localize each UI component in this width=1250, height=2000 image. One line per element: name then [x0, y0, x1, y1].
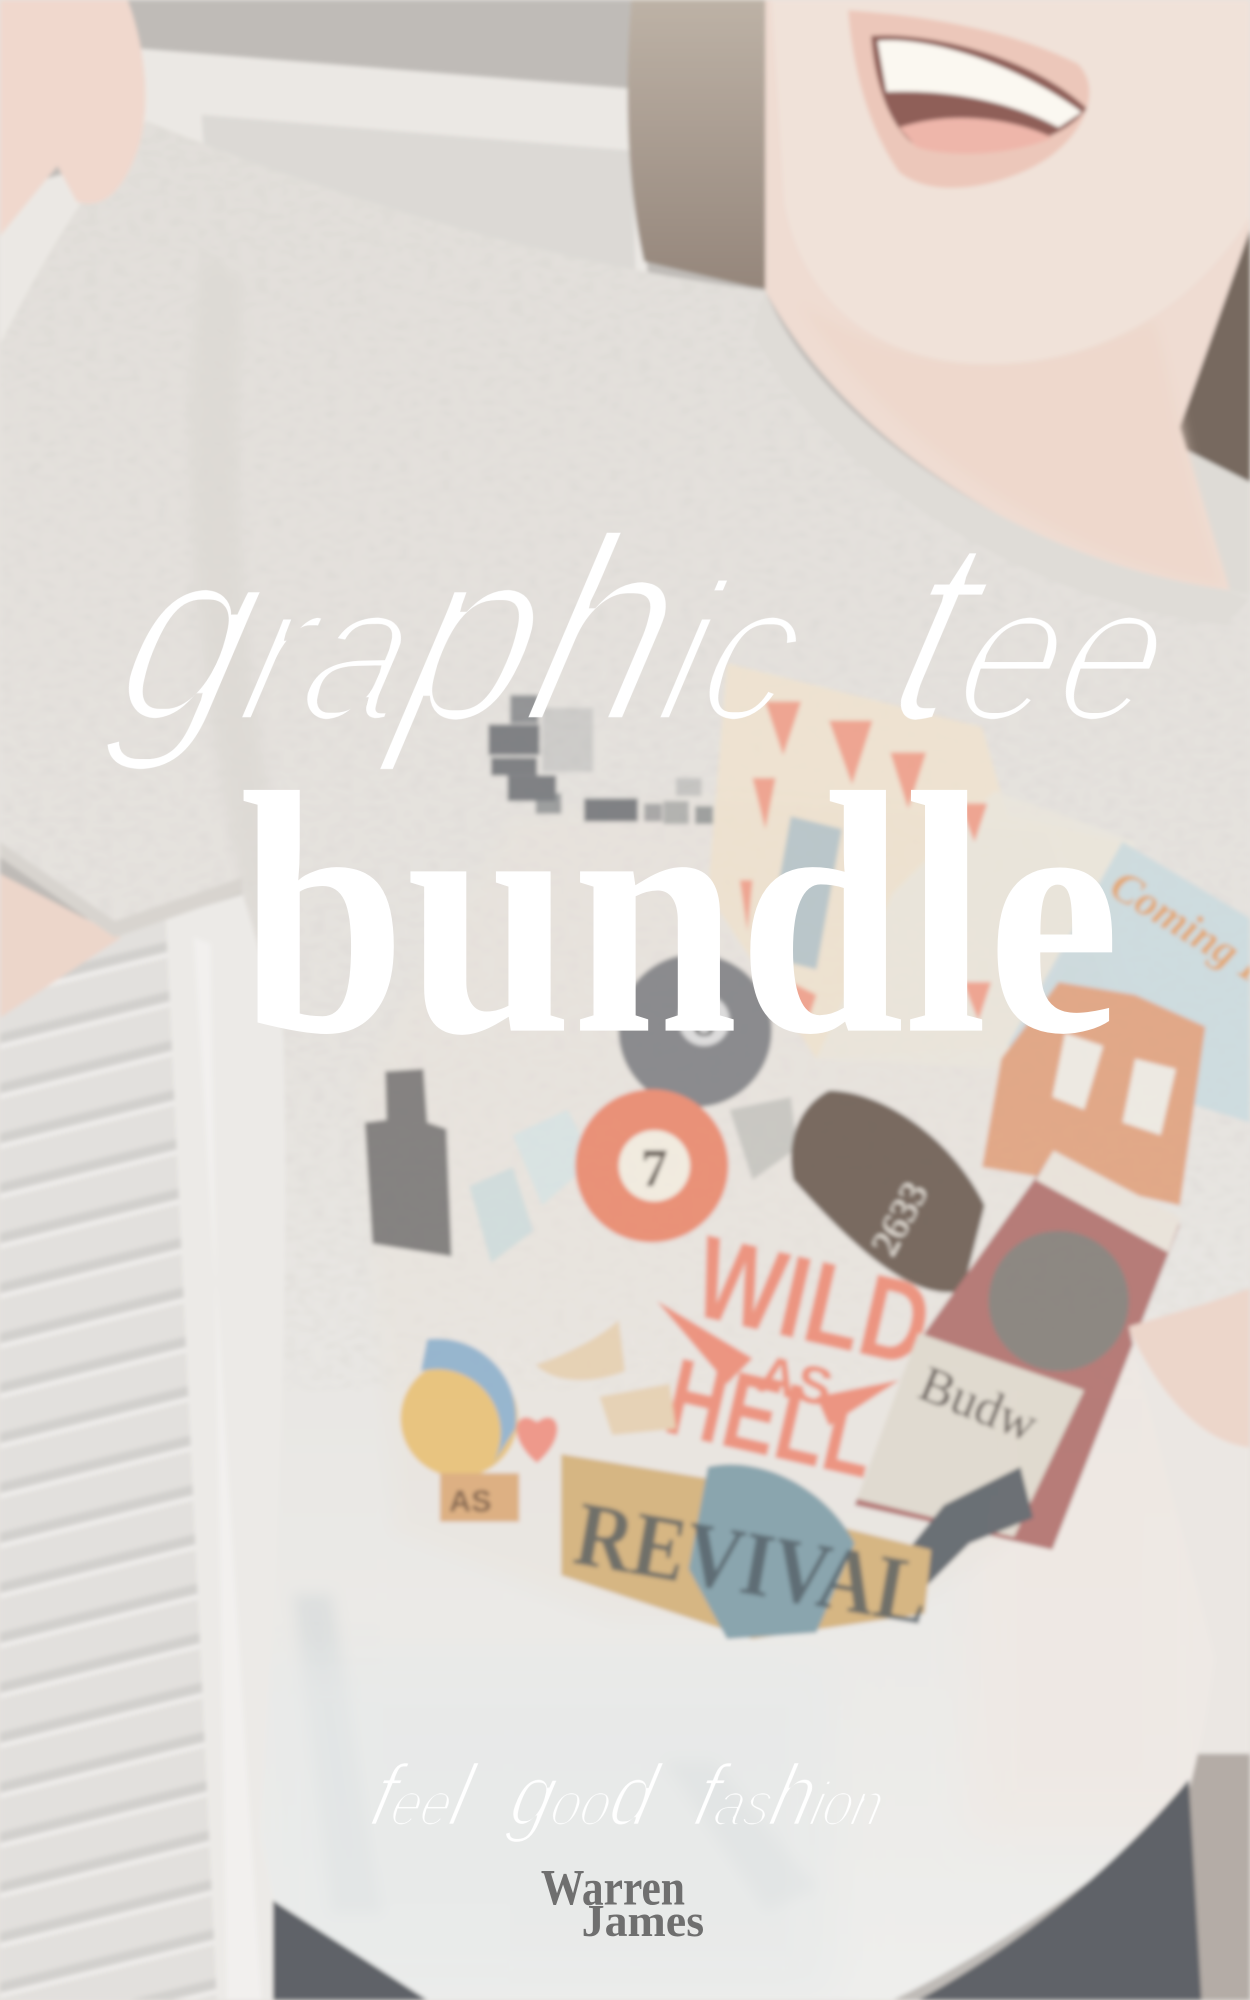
- hearts: [740, 702, 991, 1033]
- hair left: [628, 0, 816, 296]
- revival word: REVIVAL: [568, 1482, 937, 1644]
- fort worth badge: [401, 1360, 518, 1477]
- grey charm: [730, 1097, 797, 1180]
- tee heathered texture: [0, 115, 1250, 1390]
- beer can: [855, 1154, 1180, 1550]
- disco ball tiles: [489, 695, 713, 824]
- wings: [657, 1301, 899, 1426]
- letter paper: [816, 791, 1135, 1071]
- dice second: [513, 1110, 593, 1205]
- can crest: [989, 1231, 1129, 1371]
- face: [772, 0, 1250, 364]
- sleeve fold shadow: [190, 255, 293, 995]
- eight ball label: [679, 995, 730, 1046]
- eight ball: [619, 954, 772, 1107]
- logo word James: James: [582, 1895, 704, 1946]
- sleeve hem: [0, 842, 242, 940]
- printed graphic: [357, 663, 1250, 1644]
- cowboy figure: [893, 1467, 1033, 1594]
- playing cards: [710, 666, 998, 1054]
- collar: [753, 291, 1250, 625]
- hair right: [1154, 217, 1250, 482]
- word hell: HELL: [655, 1336, 888, 1502]
- main heading: bundle: bundle: [240, 723, 1120, 1107]
- right wall panel: [1122, 1314, 1250, 1760]
- tagline: feel good fashion: feel good fashion: [363, 1746, 897, 1844]
- hand: [0, 0, 145, 236]
- horn shapes: [536, 1320, 676, 1435]
- key tag: [791, 1091, 985, 1292]
- lower fold shadows: [298, 1596, 336, 1668]
- teeth: [878, 40, 1082, 128]
- neck and chest skin: [765, 0, 1250, 594]
- neck shadow: [797, 300, 1224, 587]
- lips: [848, 10, 1089, 188]
- heart: [517, 1417, 557, 1463]
- door frame: [166, 880, 296, 2000]
- key tag number: 2633: [864, 1175, 937, 1262]
- can label: [857, 1333, 1084, 1537]
- logo: Warren James: [541, 1860, 704, 1946]
- right arm: [1122, 1276, 1250, 1448]
- word wild: WILD: [683, 1210, 943, 1391]
- lower blue tint: [261, 1658, 835, 2000]
- postcard figure tops: [1052, 1033, 1176, 1135]
- badge text: AS: [449, 1484, 492, 1518]
- dice: [469, 1167, 533, 1263]
- red seven ball: [575, 1089, 728, 1242]
- left shutter lower: [0, 918, 230, 2000]
- can brand: Budw: [911, 1356, 1045, 1454]
- right collar area: [1148, 421, 1250, 612]
- revival band: [561, 1454, 931, 1639]
- word as: AS: [752, 1345, 838, 1419]
- shutter door upper panel: [202, 115, 638, 332]
- pants right: [918, 1779, 1202, 2000]
- script heading: graphic tee: graphic tee: [94, 483, 1207, 777]
- logo word Warren: Warren: [541, 1860, 685, 1916]
- revival wave: [689, 1464, 855, 1639]
- postcard: [1008, 842, 1250, 1122]
- floor: [1173, 1754, 1250, 2000]
- can lid: [1036, 1151, 1181, 1253]
- print backing: [357, 791, 1186, 1620]
- postcard figures: [982, 982, 1205, 1205]
- wild as hell lettering: [655, 1210, 943, 1502]
- card royal figure: [765, 816, 842, 969]
- right warm tint: [969, 1327, 1224, 1837]
- pants left: [273, 1901, 427, 2000]
- lighter: [365, 1069, 452, 1256]
- seven number: 7: [641, 1138, 668, 1198]
- door frame inner highlight: [194, 938, 261, 2000]
- shutter door upper: [0, 48, 651, 383]
- left arm: [0, 874, 121, 1018]
- eight number: 8: [693, 999, 715, 1045]
- mouth opening: [871, 35, 1087, 150]
- seven ball label: [619, 1130, 690, 1202]
- tongue: [899, 118, 1052, 154]
- badge banner: [440, 1473, 519, 1522]
- badge ring: [421, 1339, 516, 1467]
